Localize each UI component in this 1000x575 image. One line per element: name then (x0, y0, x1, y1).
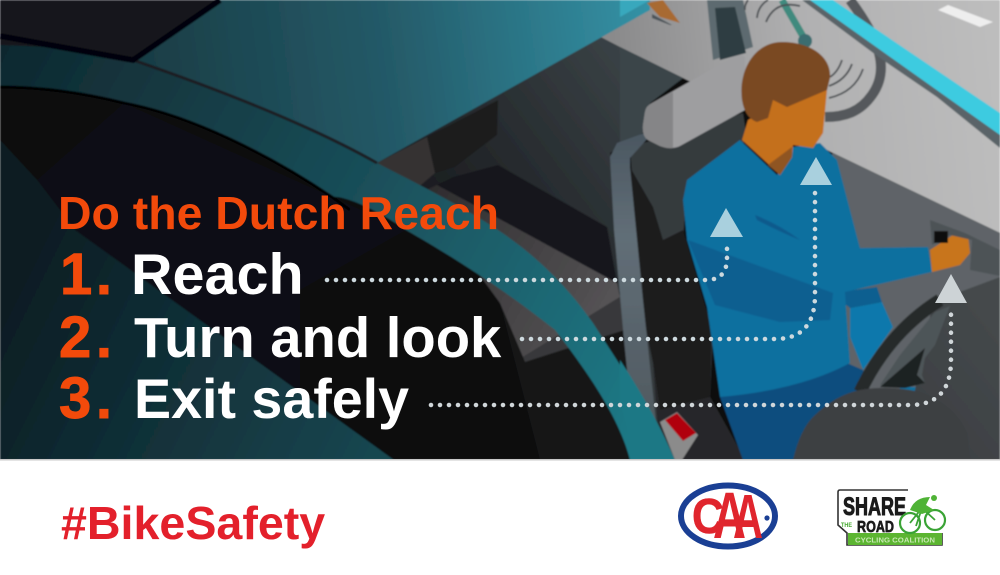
door handle recess (930, 220, 1000, 276)
arrow: turn and look (522, 157, 832, 339)
person (683, 42, 970, 460)
seat belt band (610, 133, 656, 419)
logo: Share the Road: CYCLING COALITION (855, 536, 935, 544)
step 1 (60, 242, 304, 307)
illustration: driver in car (0, 0, 1000, 460)
step 2: 2. (59, 305, 112, 370)
driver seat back (630, 113, 747, 460)
logo: Share the Road: SHARE (843, 493, 906, 521)
headrest (642, 80, 746, 150)
dashboard band front (620, 360, 675, 460)
road marking (938, 5, 993, 27)
logo: CAA (681, 478, 775, 552)
step 1: 1. (60, 242, 112, 307)
cyan window strip (810, 0, 1000, 135)
arrow: exit safely (431, 274, 967, 405)
logo: CAA: C (692, 490, 724, 544)
torso (683, 140, 932, 397)
seat belt strap (782, 0, 812, 48)
sound arcs (745, 0, 863, 98)
neck and face (742, 90, 827, 175)
arrow: reach (327, 208, 743, 280)
step 2: Turn and look (134, 306, 502, 369)
door pillar (707, 0, 753, 60)
logo: Share the Road: ROAD (857, 519, 894, 536)
logo: CAA: A (733, 483, 763, 552)
step 3: Exit safely (134, 368, 409, 430)
title: Do the Dutch Reach (58, 187, 499, 239)
rear seat back (437, 165, 617, 283)
seat belt buckle (660, 412, 698, 460)
logo: Share the Road: THE (841, 523, 852, 529)
logo: Share the Road (838, 490, 945, 545)
window rail (802, 0, 1000, 148)
hand (930, 235, 970, 272)
logo: CAA: A (713, 478, 746, 552)
legs (720, 363, 870, 460)
cyclist (900, 495, 945, 533)
door arc (825, 0, 881, 117)
hashtag: #BikeSafety (61, 497, 325, 549)
dashboard band (0, 45, 675, 460)
windshield (133, 0, 650, 163)
rear seat cushion (420, 185, 620, 357)
bottom divider (0, 459, 1000, 460)
rear-view mirror (647, 0, 680, 25)
step 3: 3. (59, 366, 112, 431)
step 1: Reach (131, 243, 304, 307)
ear (770, 99, 778, 107)
steering wheel (793, 277, 1000, 460)
hair (741, 42, 830, 122)
